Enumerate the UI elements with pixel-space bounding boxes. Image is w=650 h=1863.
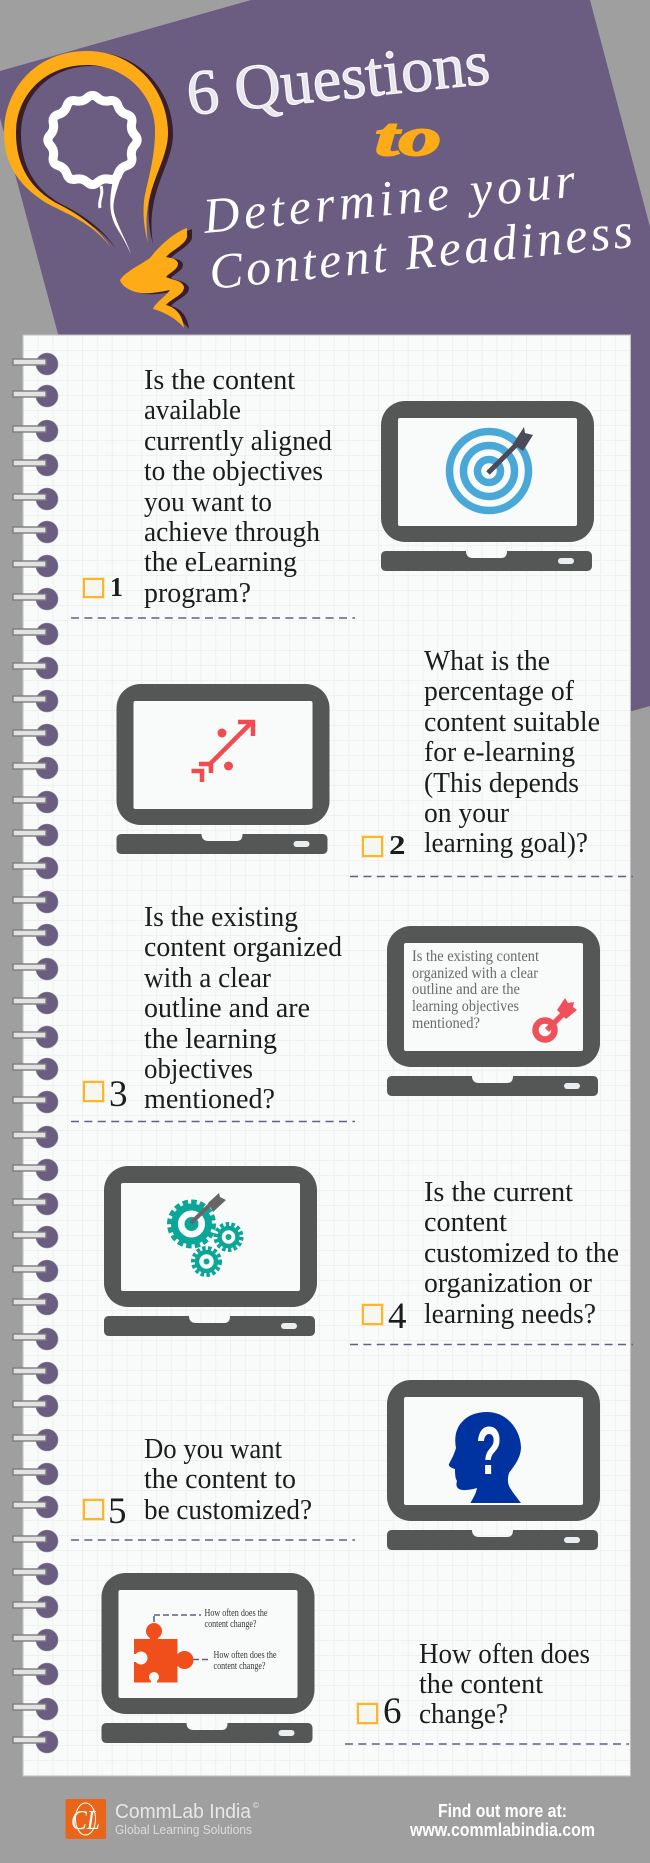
footer logo: Global Learning Solutions <box>115 1822 252 1837</box>
icon: laptop with head and question mark: ? <box>476 1413 502 1489</box>
question 2 text: learning goal)? <box>424 828 588 859</box>
question 4 text <box>424 1177 619 1330</box>
footer logo: CommLab India <box>115 1801 252 1823</box>
divider 4 <box>350 1344 633 1346</box>
question 1 text <box>144 365 332 609</box>
question 1 text: Is the content <box>144 365 295 396</box>
question 5 text: Do you want <box>144 1434 282 1465</box>
icon: laptop with text and red target: organized with a clear <box>412 965 539 982</box>
number 3 with checkbox: 3 <box>109 1074 128 1115</box>
icon: laptop with text and red target: mentioned? <box>412 1015 480 1032</box>
icon: laptop with text and red target: learning objectives <box>412 998 519 1015</box>
question 1 text: you want to <box>144 487 272 518</box>
question 2 text: on your <box>424 798 510 829</box>
number 4 with checkbox: 4 <box>388 1296 406 1337</box>
header purple banner <box>0 0 650 720</box>
icon: laptop with head and question mark <box>387 1380 600 1550</box>
icon: laptop with text and red target: outline and are the <box>412 981 520 998</box>
question 3 text: content organized <box>144 932 342 963</box>
question 6 text <box>419 1639 590 1730</box>
question 6 text: change? <box>419 1699 508 1730</box>
question 2 text: content suitable <box>424 707 600 738</box>
question 3 text: with a clear <box>144 963 272 994</box>
question 3 text: objectives <box>144 1054 253 1085</box>
question 4 text: Is the current <box>424 1177 573 1208</box>
icon: laptop with text and red target: Is the existing content <box>412 948 540 965</box>
number 3 with checkbox <box>84 1074 128 1115</box>
number 2 with checkbox <box>363 830 406 860</box>
question 3 text <box>144 902 342 1115</box>
number 4 with checkbox <box>363 1296 406 1337</box>
question 3 text: the learning <box>144 1024 277 1055</box>
title: Determine your <box>200 152 578 244</box>
icon: laptop with target <box>381 401 594 571</box>
question 6 text: How often does <box>419 1639 590 1670</box>
question 1 text: available <box>144 395 241 426</box>
question 6 text: the content <box>419 1669 543 1700</box>
title <box>183 27 635 300</box>
icon: laptop with puzzle piece: content change? <box>214 1661 266 1672</box>
icon: laptop with gears <box>104 1166 317 1336</box>
divider 2 <box>350 876 633 878</box>
number 5 with checkbox <box>84 1491 126 1532</box>
question 5 text: be customized? <box>144 1495 312 1526</box>
footer logo <box>66 1799 259 1839</box>
icon: laptop with text and red target <box>387 926 600 1096</box>
question 2 text: percentage of <box>424 676 575 707</box>
footer call to action: Find out more at: <box>438 1801 567 1821</box>
question 4 text: learning needs? <box>424 1299 596 1330</box>
icon: laptop with puzzle piece <box>102 1573 314 1743</box>
number 6 with checkbox: 6 <box>383 1691 402 1732</box>
question 2 text: (This depends <box>424 768 579 799</box>
icon: laptop with arrow <box>116 684 330 854</box>
question 1 text: the eLearning <box>144 547 297 578</box>
number 5 with checkbox: 5 <box>108 1491 126 1532</box>
icon: light bulb <box>4 51 192 329</box>
icon: laptop with puzzle piece: How often does the <box>214 1650 277 1661</box>
question 1 text: currently aligned <box>144 426 332 457</box>
footer call to action: www.commlabindia.com <box>409 1820 595 1840</box>
question 1 text: achieve through <box>144 517 320 548</box>
question 1 text: program? <box>144 578 251 609</box>
question 1 text: to the objectives <box>144 456 323 487</box>
divider 1 <box>71 617 355 619</box>
question 4 text: organization or <box>424 1268 593 1299</box>
footer logo: © <box>253 1801 259 1810</box>
question 2 text: What is the <box>424 646 550 677</box>
notebook paper <box>23 335 630 1776</box>
number 2 with checkbox: 2 <box>389 830 406 860</box>
divider 5 <box>71 1539 355 1541</box>
title: 6 Questions <box>183 27 493 129</box>
title: Content Readiness <box>207 202 635 300</box>
question 3 text: mentioned? <box>144 1084 275 1115</box>
question 5 text: the content to <box>144 1464 296 1495</box>
question 4 text: customized to the <box>424 1238 619 1269</box>
question 2 text: for e-learning <box>424 737 575 768</box>
question 2 text <box>424 646 600 859</box>
divider 3 <box>71 1120 355 1122</box>
question 3 text: Is the existing <box>144 902 298 933</box>
number 6 with checkbox <box>358 1691 402 1732</box>
spiral binding <box>13 353 58 1753</box>
question 5 text <box>144 1434 312 1526</box>
divider 6 <box>345 1743 629 1745</box>
icon: laptop with puzzle piece: How often does the <box>204 1608 268 1619</box>
number 1 with checkbox <box>84 572 123 602</box>
title: to <box>375 107 441 167</box>
question 3 text: outline and are <box>144 993 310 1024</box>
icon: laptop with puzzle piece: content change? <box>204 1619 257 1630</box>
question 4 text: content <box>424 1207 507 1238</box>
footer call to action <box>409 1801 595 1840</box>
number 1 with checkbox: 1 <box>110 572 123 602</box>
footer logo: CL <box>71 1805 100 1835</box>
